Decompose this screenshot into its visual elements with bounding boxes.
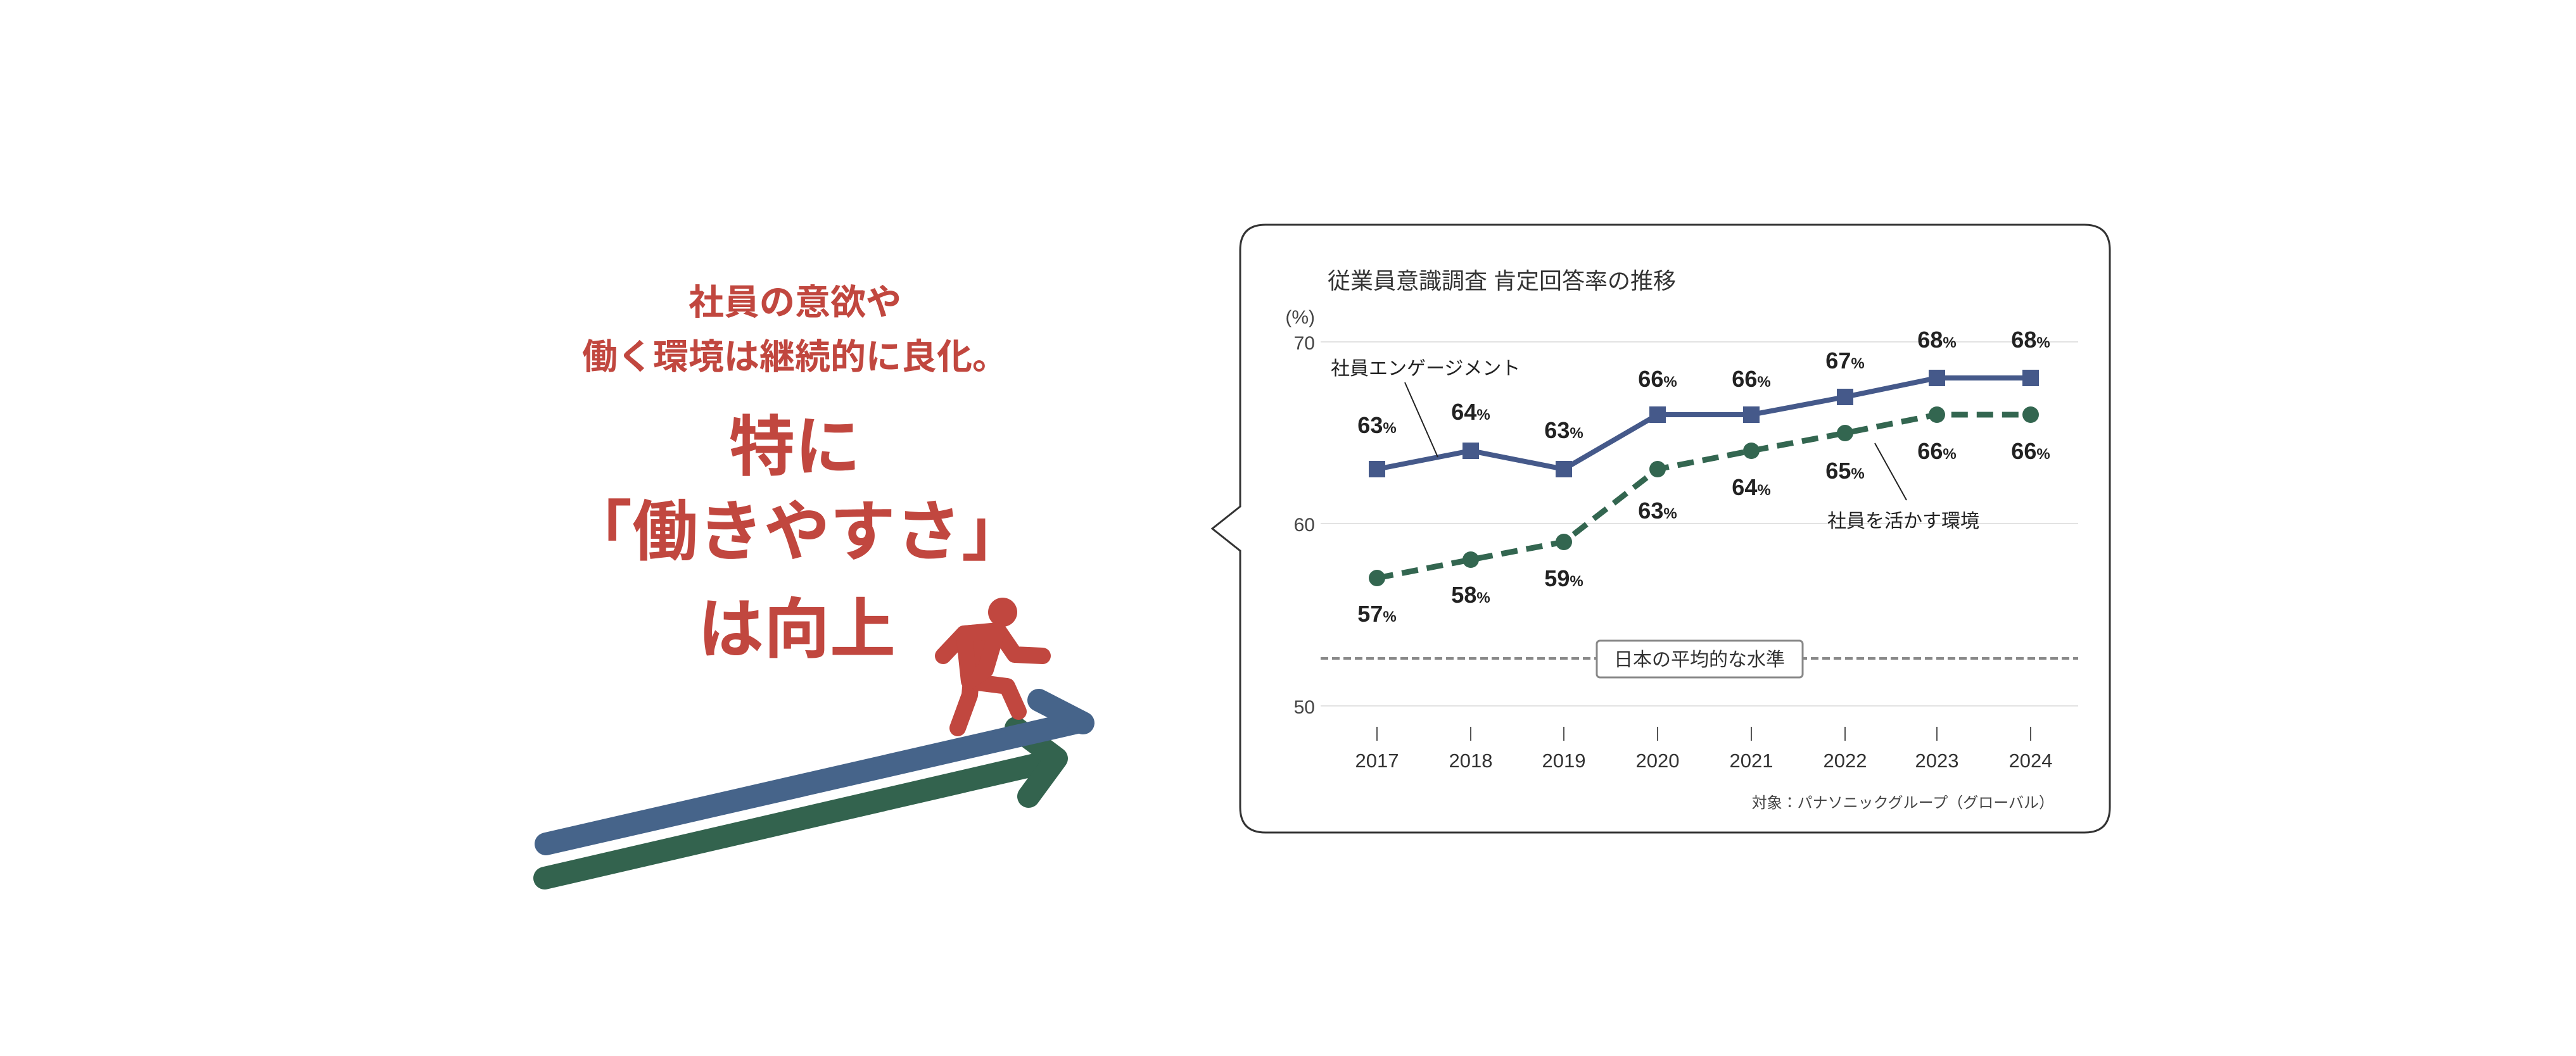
source note: 対象：パナソニックグループ（グローバル） — [1752, 795, 2054, 812]
callout: environment label — [1827, 443, 1979, 532]
line chart: 2021 — [1730, 750, 1773, 772]
y axis labels — [1285, 307, 1315, 718]
callout: engagement label — [1331, 358, 1520, 457]
y axis labels: 60 — [1294, 515, 1315, 536]
y axis labels: 70 — [1294, 333, 1315, 354]
data labels: 68% — [1917, 327, 1957, 353]
data labels: 57% — [1357, 601, 1397, 627]
Japan average dashed line — [1321, 641, 2078, 677]
data labels: 63% — [1544, 417, 1583, 443]
x axis ticks and years — [1377, 727, 2031, 741]
line chart: 2022 — [1824, 750, 1867, 772]
arrow: blue — [546, 700, 1083, 844]
main heading: は向上 — [698, 593, 896, 667]
line chart: 2019 — [1542, 750, 1585, 772]
data labels: 66% — [2011, 438, 2050, 464]
series: engagement (blue solid) — [1369, 370, 2039, 477]
data labels: 64% — [1451, 399, 1490, 425]
y axis labels: (%) — [1285, 307, 1315, 328]
data labels: 63% — [1638, 498, 1677, 524]
data labels — [1357, 327, 2050, 627]
arrow: green — [545, 728, 1056, 878]
main heading: 「働きやすさ」 — [566, 496, 1027, 569]
data labels: 63% — [1357, 412, 1397, 438]
data labels: 67% — [1825, 348, 1865, 374]
data labels: 66% — [1917, 438, 1957, 464]
line chart: 2017 — [1355, 750, 1399, 772]
series: employee environment (green dashed) — [1369, 406, 2039, 586]
data labels: 64% — [1732, 474, 1771, 500]
Japan average dashed line: 日本の平均的な水準 — [1614, 650, 1785, 670]
data labels: 59% — [1544, 565, 1583, 591]
main heading: 特に — [729, 411, 861, 484]
line chart — [1285, 307, 2078, 812]
data labels: 68% — [2011, 327, 2050, 353]
line chart: 2020 — [1636, 750, 1679, 772]
callout: environment label: 社員を活かす環境 — [1827, 511, 1979, 532]
y axis labels: 50 — [1294, 697, 1315, 718]
icon: walking person — [943, 598, 1043, 728]
callout: engagement label: 社員エンゲージメント — [1331, 358, 1520, 379]
chart title: 従業員意識調査 肯定回答率の推移 — [1328, 268, 1676, 294]
data labels: 66% — [1638, 366, 1677, 392]
subheading: 社員の意欲や — [688, 282, 901, 322]
headline text block: 働く環境は継続的に良化。 — [582, 337, 1008, 377]
data labels: 66% — [1732, 366, 1771, 392]
headline text block — [566, 282, 1027, 667]
line chart: 2024 — [2009, 750, 2052, 772]
panel: chart callout box — [1212, 225, 2110, 833]
line chart: 2023 — [1915, 750, 1958, 772]
main heading — [566, 411, 1027, 667]
data labels: 58% — [1451, 582, 1490, 608]
line chart: 2018 — [1449, 750, 1492, 772]
data labels: 65% — [1825, 458, 1865, 484]
